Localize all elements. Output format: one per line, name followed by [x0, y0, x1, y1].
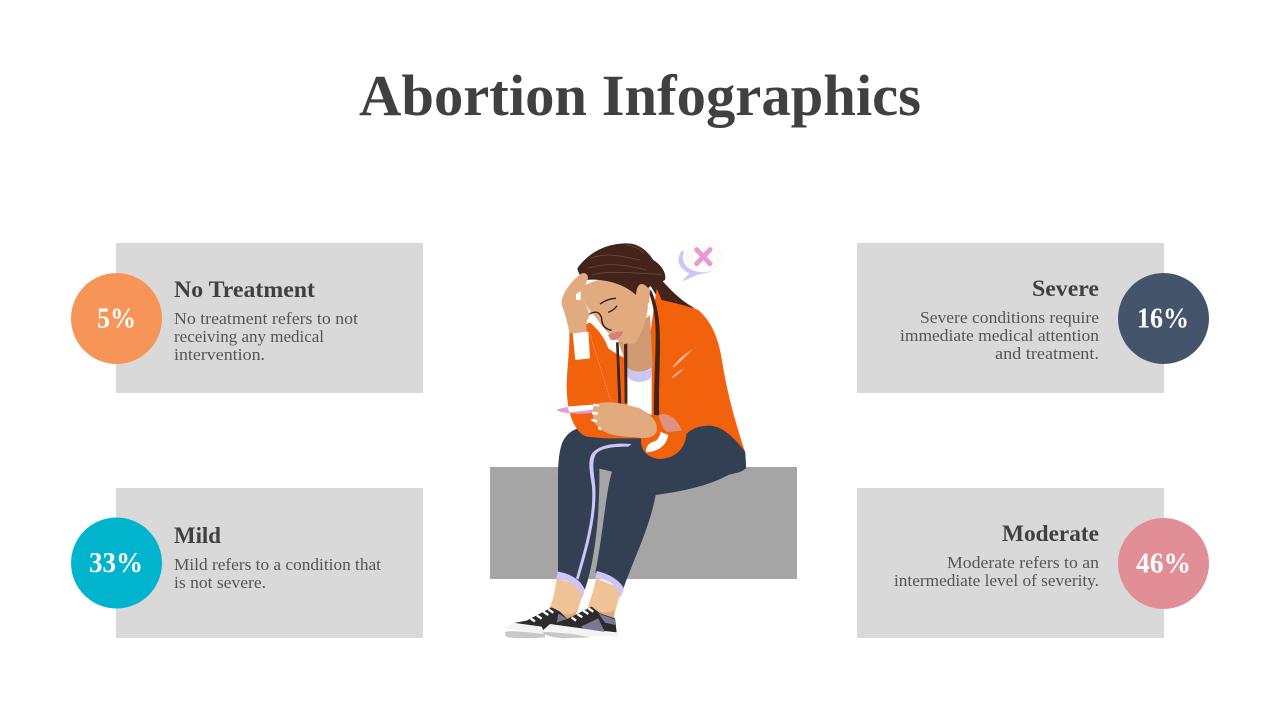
text: moderate description: Moderate refers to an	[947, 553, 1099, 572]
title: Abortion Infographics	[359, 63, 921, 128]
cuffs	[556, 572, 585, 598]
text: moderate description: intermediate level of severity.	[894, 571, 1099, 590]
heading: moderate: Moderate	[1002, 521, 1099, 546]
text: no treatment description: No treatment refers to not	[174, 309, 358, 328]
pants	[558, 426, 746, 589]
icon: 33% badge: 33%	[89, 548, 143, 579]
left sock and ankle	[547, 578, 584, 620]
icon: 16% badge: 16%	[1137, 304, 1189, 334]
icon: 46% badge: 46%	[1136, 548, 1191, 580]
icon: 16% badge	[1118, 273, 1209, 364]
legs and shoes	[503, 426, 746, 638]
shirt collar	[627, 367, 652, 415]
illustration: seated woman	[503, 243, 746, 638]
icon: 46% badge	[1118, 518, 1209, 609]
text: mild description	[174, 555, 381, 592]
icon: cross mark	[697, 250, 710, 264]
icon: 5% badge: 5%	[97, 304, 136, 334]
face details	[589, 298, 617, 330]
text: severe description	[900, 308, 1099, 363]
heading: mild: Mild	[174, 523, 221, 548]
text: mild description: is not severe.	[174, 573, 266, 592]
speech bubble back	[679, 250, 717, 282]
panel: mild	[71, 488, 423, 638]
neck	[618, 315, 653, 372]
lower sleeve	[641, 430, 687, 459]
jacket highlights	[672, 349, 693, 378]
shoe front	[550, 607, 617, 632]
face	[581, 279, 648, 344]
hair	[577, 243, 665, 295]
panel: moderate	[857, 488, 1209, 638]
text: no treatment description: receiving any medical	[174, 327, 324, 346]
text: severe description: immediate medical attention	[900, 326, 1099, 345]
text: moderate description	[894, 553, 1099, 590]
icon: 33% badge	[71, 518, 162, 608]
icon: 5% badge	[71, 273, 162, 364]
upper body	[556, 243, 746, 488]
heading: severe: Severe	[1032, 276, 1099, 301]
text: no treatment description	[174, 309, 358, 364]
hand on forehead	[562, 273, 590, 333]
hair back	[650, 275, 695, 308]
pregnancy test	[556, 405, 613, 414]
panel: severe	[857, 243, 1209, 393]
hand holding test	[593, 402, 657, 438]
shoe back	[512, 607, 570, 630]
sleeve cuff	[573, 332, 590, 360]
text: no treatment description: intervention.	[174, 345, 265, 364]
jacket lining stripes	[616, 342, 627, 403]
speech bubble front	[683, 243, 723, 272]
text: mild description: Mild refers to a condition that	[174, 555, 381, 574]
text: severe description: Severe conditions require	[920, 308, 1099, 327]
panel: no treatment	[71, 243, 423, 393]
heading: no treatment: No Treatment	[174, 277, 315, 302]
sleeve patch	[658, 414, 684, 442]
jacket	[567, 288, 745, 452]
right thigh over jacket	[670, 426, 746, 488]
bench	[490, 467, 797, 579]
text: severe description: and treatment.	[995, 344, 1099, 363]
side stripe	[576, 444, 632, 579]
